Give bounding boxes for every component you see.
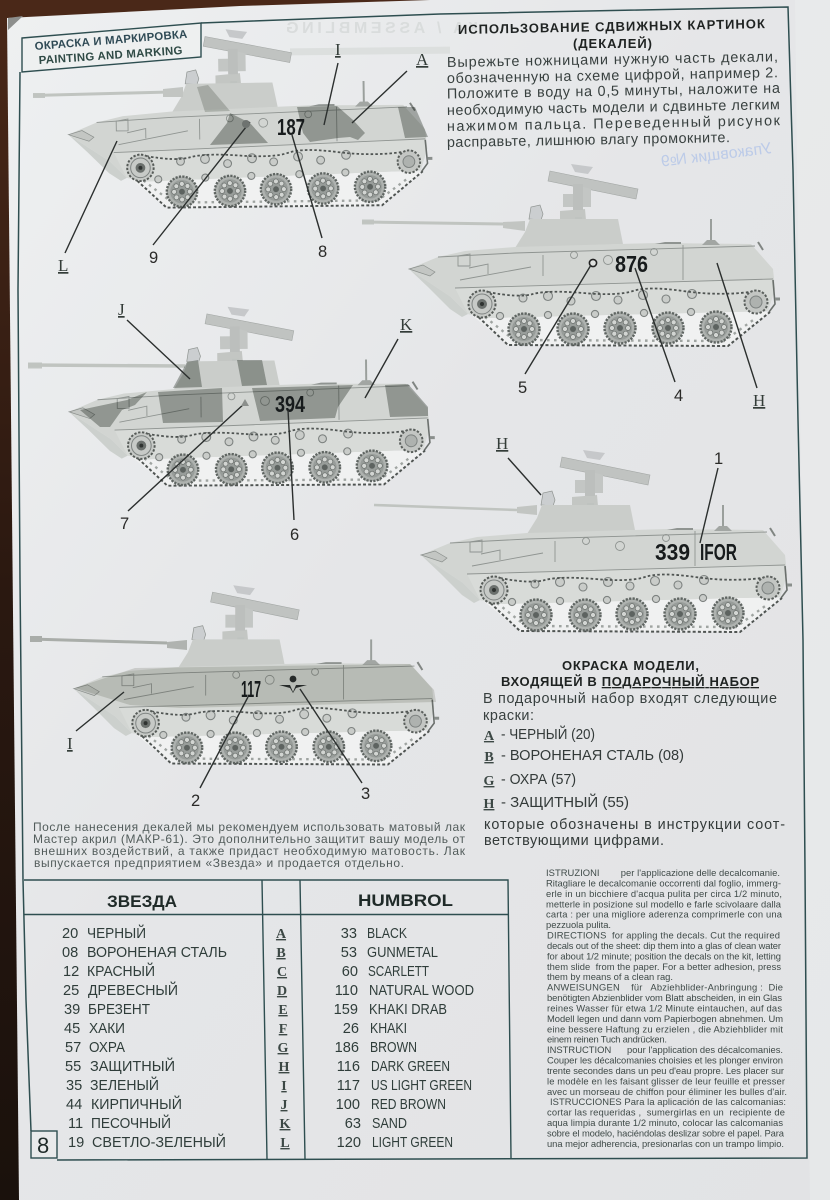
Zvezda paint rows: 57 bbox=[65, 1040, 81, 1056]
multilingual decal instructions: them by means of a clean rag. bbox=[547, 971, 673, 982]
decal number: 339 bbox=[655, 539, 690, 565]
callouts tank 2: 4 bbox=[674, 387, 683, 405]
multilingual decal instructions: Couper les décalcomanies choisies et les plonger environ bbox=[547, 1055, 783, 1066]
instructions: using decals (Russian) bbox=[447, 16, 781, 151]
tank 4: number 339 IFOR bbox=[374, 450, 792, 632]
Zvezda paint rows: 45 bbox=[64, 1021, 80, 1037]
show-through mirrored heading from reverse of sheet: КА / ASSEMBLING bbox=[286, 20, 478, 37]
instructions: using decals (Russian): Положите в воду на 0,5 минуты, наложите на bbox=[447, 81, 780, 102]
callouts tank 5 bbox=[67, 689, 370, 810]
callouts tank 4: H bbox=[496, 434, 508, 453]
multilingual decal instructions: DIRECTIONS for appling the decals. Cut the required bbox=[547, 930, 780, 940]
varnish note: выпускается предприятием «Звезда» и продается отдельно. bbox=[34, 856, 404, 870]
Humbrol paint rows: 60 bbox=[342, 964, 358, 980]
multilingual decal instructions: einem reinen Tuch andrücken. bbox=[547, 1034, 667, 1045]
Humbrol paint rows bbox=[334, 926, 474, 1151]
decal letters IFOR: IFOR bbox=[700, 539, 737, 565]
Zvezda paint rows: ЗЕЛЕНЫЙ bbox=[90, 1076, 159, 1094]
gift set paint heading and list: которые обозначены в инструкции соот- bbox=[484, 817, 785, 833]
Humbrol paint rows: 100 bbox=[336, 1097, 360, 1113]
Zvezda paint rows: ЧЕРНЫЙ bbox=[87, 924, 146, 942]
reference letters: H bbox=[279, 1060, 290, 1075]
Zvezda paint rows bbox=[62, 924, 227, 1151]
reference letters: F bbox=[279, 1022, 287, 1037]
decal paratrooper emblem bbox=[279, 676, 307, 693]
callouts tank 1: A bbox=[416, 50, 429, 69]
Humbrol paint rows: KHAKI bbox=[370, 1021, 407, 1037]
gift set paint heading and list: ветствующими цифрами. bbox=[484, 833, 664, 849]
gift set paint heading and list: краски: bbox=[483, 708, 534, 724]
Humbrol paint rows: 63 bbox=[345, 1116, 361, 1132]
multilingual decal instructions: metterle in posizione sul modello e farle scivolaare dalla bbox=[546, 898, 782, 909]
show-through mirrored heading from reverse of sheet bbox=[286, 20, 478, 55]
multilingual decal instructions: ANWEISUNGEN für Abziehblider-Anbringung : Die bbox=[547, 982, 783, 993]
Humbrol paint rows: KHAKI DRAB bbox=[369, 1002, 447, 1018]
multilingual decal instructions: carta : per una migliore aderenza comprimerle con una bbox=[546, 909, 783, 920]
multilingual decal instructions: for about 1/2 minute; position the decals on the kit, letting bbox=[547, 950, 781, 961]
callouts tank 5: 3 bbox=[361, 785, 370, 803]
decal number: 394 bbox=[275, 391, 305, 417]
reference letters: D bbox=[277, 984, 287, 999]
Humbrol paint rows: 26 bbox=[343, 1021, 359, 1037]
decal number: 187 bbox=[277, 114, 305, 140]
decal roundel bbox=[589, 259, 597, 267]
multilingual decal instructions: Modell legen und dann vom Papierbogen abnehmen. Um bbox=[547, 1013, 783, 1024]
callouts tank 3: 7 bbox=[120, 515, 129, 533]
instructions: using decals (Russian): Вырежьте ножницами нужную часть декали, bbox=[447, 49, 778, 71]
Humbrol paint rows: 186 bbox=[335, 1040, 359, 1056]
Humbrol paint rows: 117 bbox=[337, 1078, 360, 1094]
tank 3: camouflage, number 394 bbox=[28, 305, 435, 488]
Zvezda paint rows: СВЕТЛО-ЗЕЛЕНЫЙ bbox=[92, 1133, 226, 1151]
reference letters: B bbox=[276, 946, 286, 961]
Humbrol paint rows: 159 bbox=[334, 1002, 358, 1018]
multilingual decal instructions: cortar las requeridas , sumergirlas en un recipiente de bbox=[547, 1107, 785, 1118]
Zvezda paint rows: КИРПИЧНЫЙ bbox=[91, 1095, 182, 1113]
reference letters: G bbox=[278, 1041, 289, 1056]
callouts tank 1: I bbox=[335, 40, 341, 59]
callouts tank 3: K bbox=[400, 315, 413, 334]
multilingual decal instructions: eine bessere Haftung zu erzielen , die Abziehblider mit bbox=[547, 1023, 783, 1034]
multilingual decal instructions: aqua limpia durante 1/2 minuto, colocar las calcomanias bbox=[547, 1117, 783, 1128]
multilingual decal instructions: una mejor adherencia, presionarlas con un trampo limpio. bbox=[547, 1138, 784, 1149]
instructions: using decals (Russian): нажимом пальца. Переведенный рисунок bbox=[447, 113, 781, 135]
callouts tank 5: I bbox=[67, 734, 73, 753]
tank 1: camouflage, number 187 bbox=[33, 26, 433, 210]
instructions: using decals (Russian): обозначенную на схеме цифрой, например 2. bbox=[447, 65, 778, 87]
gift set paint heading and list: H bbox=[484, 797, 495, 812]
gift set paint heading and list: - ЧЕРНЫЙ (20) bbox=[501, 725, 595, 743]
Zvezda paint rows: 44 bbox=[66, 1097, 82, 1113]
column heading Humbrol: HUMBROL bbox=[358, 891, 453, 910]
multilingual decal instructions: ISTRUZIONI per l'applicazione delle decalcomanie. bbox=[546, 867, 780, 878]
gift set paint heading and list: ОКРАСКА МОДЕЛИ, bbox=[562, 658, 699, 673]
reference letters: C bbox=[277, 965, 287, 980]
Zvezda paint rows: ХАКИ bbox=[89, 1021, 125, 1037]
gift set paint heading and list: B bbox=[484, 750, 494, 765]
header box: painting and marking: PAINTING AND MARKING bbox=[38, 45, 183, 67]
multilingual decal instructions: avec un morseau de chiffon pour éliminer les bulles d'air. bbox=[547, 1086, 787, 1097]
callouts tank 4 bbox=[496, 434, 723, 543]
decal number: 876 bbox=[615, 251, 648, 277]
Humbrol paint rows: 116 bbox=[337, 1059, 360, 1075]
Humbrol paint rows: NATURAL WOOD bbox=[369, 983, 474, 999]
Zvezda paint rows: 12 bbox=[63, 964, 79, 980]
page number box bbox=[31, 1131, 57, 1158]
Zvezda paint rows: ДРЕВЕСНЫЙ bbox=[88, 981, 178, 999]
gift set paint heading and list bbox=[483, 658, 785, 849]
gift set paint heading and list: - ВОРОНЕНАЯ СТАЛЬ (08) bbox=[501, 747, 684, 764]
gift set paint heading and list: G bbox=[484, 774, 495, 789]
gift set paint heading and list: В подарочный набор входят следующие bbox=[483, 691, 777, 707]
Zvezda paint rows: 55 bbox=[65, 1059, 81, 1075]
paint cross-reference table bbox=[24, 880, 511, 1159]
instructions: using decals (Russian): необходимую часть модели и сдвиньте легким bbox=[447, 97, 780, 119]
Humbrol paint rows: SCARLETT bbox=[368, 964, 429, 980]
callouts tank 4: 1 bbox=[714, 450, 723, 468]
Zvezda paint rows: 11 bbox=[68, 1116, 83, 1132]
tank 2: number 876 bbox=[362, 164, 780, 346]
Humbrol paint rows: SAND bbox=[372, 1116, 407, 1132]
reference letters bbox=[276, 927, 291, 1151]
Humbrol paint rows: US LIGHT GREEN bbox=[371, 1078, 472, 1094]
multilingual decal instructions: trente secondes dans un peu d'eau propre. Les placer sur bbox=[547, 1065, 784, 1076]
Zvezda paint rows: 25 bbox=[63, 983, 79, 999]
reference letters: L bbox=[280, 1136, 290, 1151]
gift set paint heading and list: - ОХРА (57) bbox=[501, 771, 576, 788]
column heading Zvezda: ЗВЕЗДА bbox=[107, 892, 177, 911]
Zvezda paint rows: ПЕСОЧНЫЙ bbox=[91, 1114, 171, 1132]
reference letters: E bbox=[278, 1003, 288, 1018]
multilingual decal instructions: INSTRUCTION pour l'application des décalcomanies. bbox=[547, 1044, 783, 1055]
Zvezda paint rows: 35 bbox=[66, 1078, 82, 1094]
callouts tank 1 bbox=[58, 40, 429, 275]
multilingual decal instructions: reines Wasser für etwa 1/2 Minute eintauchen, auf das bbox=[547, 1002, 782, 1014]
table grid bbox=[24, 880, 511, 1159]
Humbrol paint rows: BLACK bbox=[367, 926, 407, 942]
Humbrol paint rows: 110 bbox=[335, 983, 358, 999]
callouts tank 2: H bbox=[753, 391, 765, 410]
Zvezda paint rows: 19 bbox=[68, 1135, 84, 1151]
Zvezda paint rows: ОХРА bbox=[89, 1040, 125, 1056]
instructions: using decals (Russian): (ДЕКАЛЕЙ) bbox=[573, 36, 652, 51]
Zvezda paint rows: ЗАЩИТНЫЙ bbox=[90, 1057, 175, 1075]
multilingual decal instructions: erle in un bicchiere d'acqua pulita per circa 1/2 minuto, bbox=[546, 888, 782, 899]
Humbrol paint rows: DARK GREEN bbox=[371, 1059, 450, 1075]
page number box: 8 bbox=[37, 1133, 49, 1158]
multilingual decal instructions: Ritagliare le decalcomanie occorrenti dal foglio, immerg- bbox=[546, 877, 781, 888]
varnish note: внешних воздействий, а также придаст необходимую матовость. Лак bbox=[34, 844, 466, 858]
gift set paint heading and list: ВХОДЯЩЕЙ В ПОДАРОЧНЫЙ НАБОР bbox=[501, 674, 759, 689]
Zvezda paint rows: КРАСНЫЙ bbox=[87, 962, 155, 980]
varnish note bbox=[33, 820, 466, 870]
Zvezda paint rows: 08 bbox=[62, 945, 78, 961]
header box: painting and marking: ОКРАСКА И МАРКИРОВКА bbox=[34, 29, 188, 53]
Humbrol paint rows: BROWN bbox=[370, 1040, 417, 1056]
Zvezda paint rows: БРЕЗЕНТ bbox=[88, 1002, 150, 1018]
varnish note: После нанесения декалей мы рекомендуем использовать матовый лак bbox=[33, 820, 466, 834]
multilingual decal instructions: pezzuola pulita. bbox=[546, 919, 611, 930]
Humbrol paint rows: LIGHT GREEN bbox=[372, 1135, 453, 1151]
reference letters: I bbox=[281, 1079, 287, 1094]
multilingual decal instructions: ISTRUCCIONES Para la aplicación de las calcomanias: bbox=[550, 1096, 786, 1107]
callouts tank 3: J bbox=[118, 300, 125, 319]
callouts tank 2 bbox=[518, 263, 765, 410]
multilingual decal instructions: benötigten Abzienblider vom Blatt abscheiden, in ein Glas bbox=[547, 992, 782, 1003]
Humbrol paint rows: RED BROWN bbox=[371, 1097, 446, 1113]
multilingual decal instructions: them slide from the paper. For a better adhesion, press bbox=[547, 961, 781, 972]
Humbrol paint rows: 33 bbox=[341, 926, 357, 942]
Zvezda paint rows: 39 bbox=[64, 1002, 80, 1018]
multilingual decal instructions: le modèle en les faisant glisser de leur feuille et presser bbox=[547, 1075, 785, 1086]
header box: painting and marking bbox=[22, 23, 201, 72]
show-through blue stamp from reverse: Упаковщик №9 bbox=[660, 140, 772, 171]
decal number: 117 bbox=[241, 676, 261, 702]
reference letters: A bbox=[276, 927, 287, 942]
callouts tank 3 bbox=[118, 300, 413, 544]
callouts tank 1: 9 bbox=[149, 249, 158, 267]
gift set paint heading and list: A bbox=[484, 729, 495, 744]
instructions: using decals (Russian): ИСПОЛЬЗОВАНИЕ СДВИЖНЫХ КАРТИНОК bbox=[458, 16, 765, 37]
varnish note: Мастер акрил (МАКР-61). Это дополнительно защитит вашу модель от bbox=[33, 832, 466, 846]
reference letters: J bbox=[280, 1098, 288, 1113]
multilingual decal instructions: sobre el modelo, haciéndolas deslizar sobre el papel. Para bbox=[547, 1128, 785, 1138]
Humbrol paint rows: 120 bbox=[337, 1135, 361, 1151]
Zvezda paint rows: ВОРОНЕНАЯ СТАЛЬ bbox=[87, 945, 227, 961]
callouts tank 5: 2 bbox=[191, 792, 200, 810]
Humbrol paint rows: GUNMETAL bbox=[367, 945, 438, 961]
callouts tank 1: L bbox=[58, 256, 68, 275]
multilingual decal instructions bbox=[546, 867, 787, 1149]
reference letters: K bbox=[280, 1117, 291, 1132]
Humbrol paint rows: 53 bbox=[341, 945, 357, 961]
tank 5: number 117 bbox=[30, 585, 439, 765]
instructions: using decals (Russian): расправьте, лишнюю влагу промокните. bbox=[447, 130, 730, 151]
gift set paint heading and list: - ЗАЩИТНЫЙ (55) bbox=[501, 793, 629, 811]
multilingual decal instructions: decals out of the sheet: dip them into a glas of clean water bbox=[547, 940, 781, 951]
callouts tank 2: 5 bbox=[518, 379, 527, 397]
callouts tank 1: 8 bbox=[318, 243, 327, 261]
Zvezda paint rows: 20 bbox=[62, 926, 78, 942]
callouts tank 3: 6 bbox=[290, 526, 299, 544]
